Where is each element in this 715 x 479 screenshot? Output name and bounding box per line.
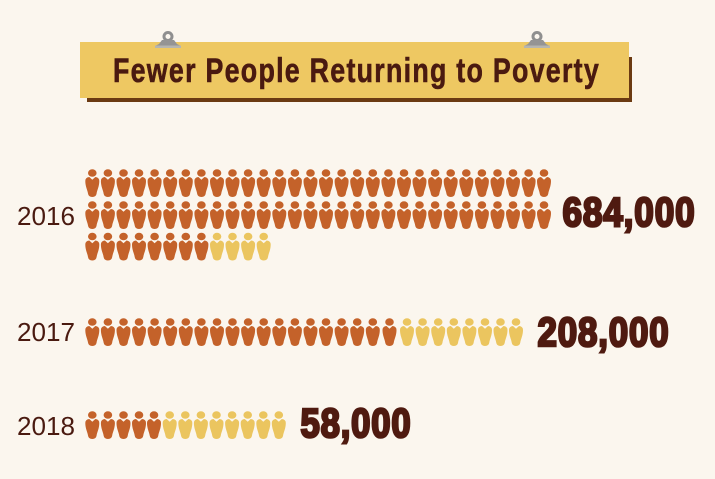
pictogram: 2018 [85, 411, 286, 439]
value: 58,000: 58,000 [300, 400, 412, 446]
title: Fewer People Returning to Poverty [113, 52, 600, 90]
value: 684,000: 684,000 [562, 189, 696, 235]
banner [80, 32, 632, 102]
icon: right clip [524, 32, 550, 48]
label: 2016: 2016 [17, 201, 75, 231]
banner shadow [87, 57, 632, 102]
pictogram: 2017 [85, 318, 523, 346]
label: 2017: 2017 [17, 317, 75, 347]
label: 2018: 2018 [17, 411, 75, 441]
value: 208,000: 208,000 [538, 309, 670, 355]
banner plate [80, 42, 629, 98]
icon: left clip [155, 32, 181, 48]
pictogram: 2016 [85, 169, 551, 260]
